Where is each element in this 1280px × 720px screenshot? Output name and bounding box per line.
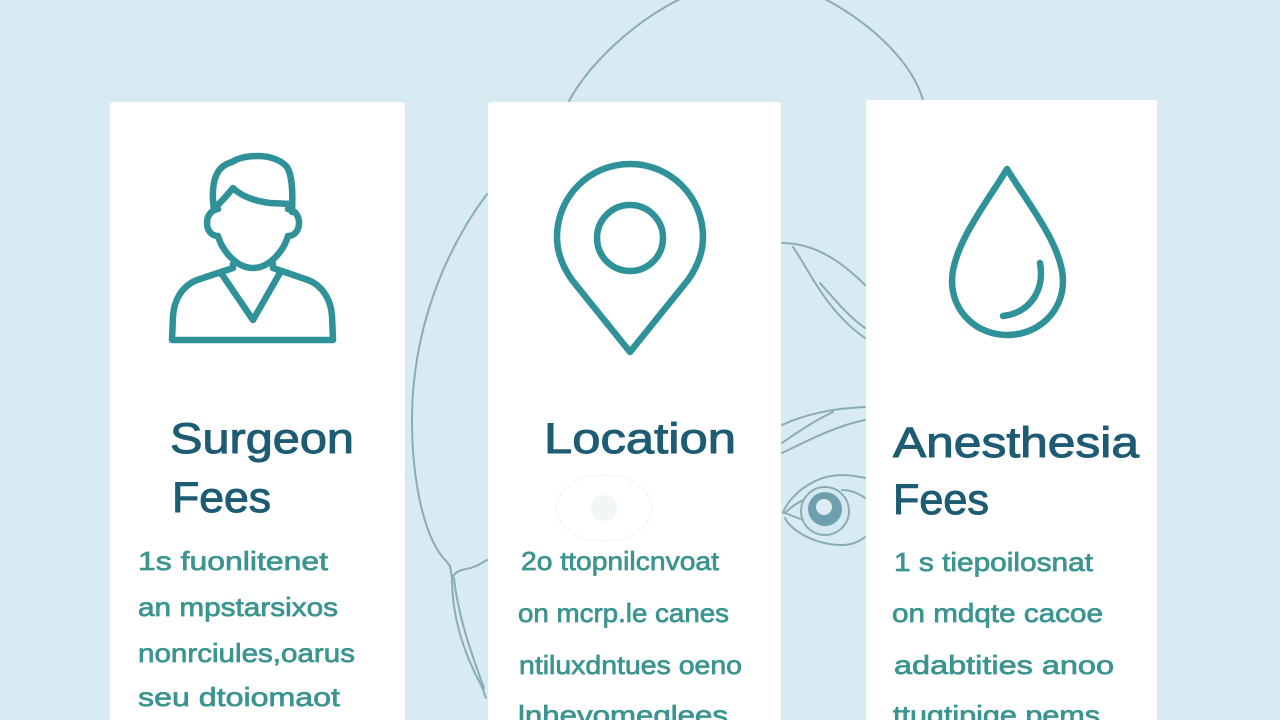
card background [488,102,781,720]
heading: surgeon fees: Surgeon [170,415,354,463]
icon: location pin [557,164,703,352]
heading: location: Location [544,415,736,463]
body text: location: on mcrp.le canes [518,598,729,628]
body text: location: ntiluxdntues oeno [519,650,742,680]
body text: anesthesia fees: 1 s tiepoilosnat [894,547,1094,577]
icon: surgeon [172,156,333,340]
body text: surgeon fees: nonrciules,oarus [138,638,355,668]
body text: anesthesia fees: adabtities anoo [894,650,1114,680]
body text: anesthesia fees: on mdqte cacoe [892,598,1103,628]
card background [110,102,405,720]
icon: eye [783,475,865,545]
heading: anesthesia fees: Fees [893,476,989,524]
card background [866,100,1157,720]
face line drawing [412,0,923,698]
body text: surgeon fees: an mpstarsixos [138,592,338,622]
panel: location [488,102,781,720]
panel: surgeon fees [110,102,405,720]
icon: drop [952,169,1063,335]
body text: surgeon fees: seu dtoiomaot [138,682,341,712]
faint eye watermark [556,475,652,541]
body text: location: 2o ttopnilcnvoat [521,546,720,576]
heading: surgeon fees: Fees [172,474,271,522]
body text: surgeon fees: 1s fuonlitenet [138,546,329,576]
panel: anesthesia fees [866,100,1157,720]
heading: anesthesia fees: Anesthesia [893,419,1139,467]
